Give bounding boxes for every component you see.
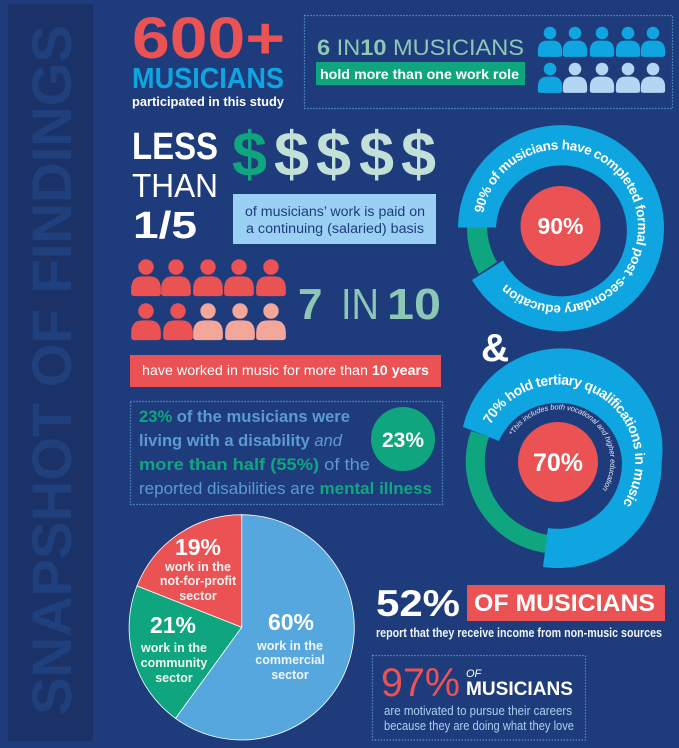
banner: worked in music 10 years: have worked in music for more than 10 years (142, 362, 429, 378)
icons: dollar signs (232, 120, 436, 190)
banner: worked in music 10 years (130, 355, 441, 387)
text: disability finding (139, 407, 432, 498)
stat: less than 1/5: THAN (132, 167, 218, 204)
stat: less than 1/5 (132, 126, 218, 247)
stat: 97%: 97% (381, 661, 460, 705)
centre: 70% (518, 422, 598, 502)
stat: 7 in 10 (298, 280, 441, 329)
text: disability finding: 23% of the musicians were (139, 407, 350, 426)
label: 21% (140, 612, 207, 685)
ring chart: 90% post-secondary (458, 125, 664, 332)
label: 21%: 21% (150, 612, 196, 638)
stat: 7 in 10: 7 (298, 280, 322, 329)
text: disability finding: more than half (55%) of the (139, 455, 370, 474)
label: 60%: sector (271, 668, 309, 682)
label: 60% (255, 609, 325, 682)
stat: 600+ musicians: 600+ (132, 6, 285, 71)
icons: dollar signs: $ (359, 120, 394, 190)
label: 60%: work in the (256, 639, 323, 653)
label: 60%: 60% (268, 609, 314, 635)
badge: 23% (371, 407, 435, 471)
icons: dollar signs: $ (232, 120, 267, 190)
label: 19%: work in the (164, 560, 231, 574)
stat: less than 1/5: 1/5 (133, 205, 197, 247)
label: 19%: not-for-profit (160, 574, 237, 588)
icons: 6 of 10 people (538, 27, 665, 93)
heading: 6 in 10: 6 IN10 MUSICIANS (317, 35, 524, 60)
heading: of musicians: MUSICIANS (466, 679, 573, 700)
label: 60%: commercial (255, 653, 325, 667)
ampersand: & (481, 327, 509, 370)
callout: salaried work (233, 194, 436, 244)
text: disability finding: living with a disability and (139, 431, 343, 450)
heading: of musicians: OF (466, 668, 483, 680)
label: 19%: 19% (175, 534, 221, 560)
label: 21%: work in the (140, 641, 207, 655)
centre: 70%: 70% (533, 449, 583, 477)
banner: of musicians (467, 585, 665, 621)
label: 19% (160, 534, 237, 603)
panel: 6 in 10 musicians (304, 16, 672, 108)
text: motivation (384, 704, 574, 733)
centre: 90%: 90% (537, 213, 584, 239)
stat: 52% of musicians (376, 583, 665, 640)
sidebar title: SNAPSHOT OF FINDINGS (20, 25, 83, 715)
stat: 600+ musicians: MUSICIANS (132, 63, 284, 95)
ring text: 90% of musicians have completed formal post -secondary education (474, 140, 646, 314)
label: hold more than one role (316, 62, 525, 85)
stat: less than 1/5: LESS (132, 126, 218, 168)
centre: 90% (520, 186, 600, 266)
callout: salaried work: of musicians’ work is paid on (245, 204, 425, 219)
label: 19%: sector (179, 589, 217, 603)
panel: 97% of musicians (372, 656, 586, 740)
banner: of musicians: OF MUSICIANS (474, 590, 655, 617)
icons: 7 of 10 people (131, 259, 286, 340)
callout: salaried work: a continuing (salaried) basis (246, 221, 424, 236)
ring chart: 70% tertiary qualifications (463, 348, 662, 568)
label: 21%: sector (155, 671, 193, 685)
footnote: vocational and higher education: *This includes both vocational and higher education (509, 404, 616, 491)
text: motivation: because they are doing what they love (384, 719, 574, 733)
stat: 52% of musicians: 52% (376, 583, 460, 624)
panel: disability (130, 402, 442, 504)
label: hold more than one role: hold more than one work role (320, 66, 519, 82)
ring text: 70% hold tertiary qualifications in music (482, 374, 646, 506)
icons: dollar signs: $ (401, 120, 436, 190)
stat: 600+ musicians: participated in this study (132, 94, 285, 109)
text: disability finding: reported disabilities are mental illness (139, 479, 432, 498)
label: 21%: community (141, 656, 207, 670)
heading: of musicians (466, 668, 573, 700)
badge: 23%: 23% (382, 429, 424, 452)
stat: 7 in 10: 10 (387, 280, 441, 329)
stat: 7 in 10: IN (341, 280, 379, 329)
text: motivation: are motivated to pursue their careers (384, 704, 572, 718)
sidebar title panel (8, 4, 93, 741)
pie chart: work sector (129, 515, 354, 740)
icons: dollar signs: $ (274, 120, 309, 190)
stat: 600+ musicians (132, 6, 285, 109)
icons: dollar signs: $ (316, 120, 351, 190)
